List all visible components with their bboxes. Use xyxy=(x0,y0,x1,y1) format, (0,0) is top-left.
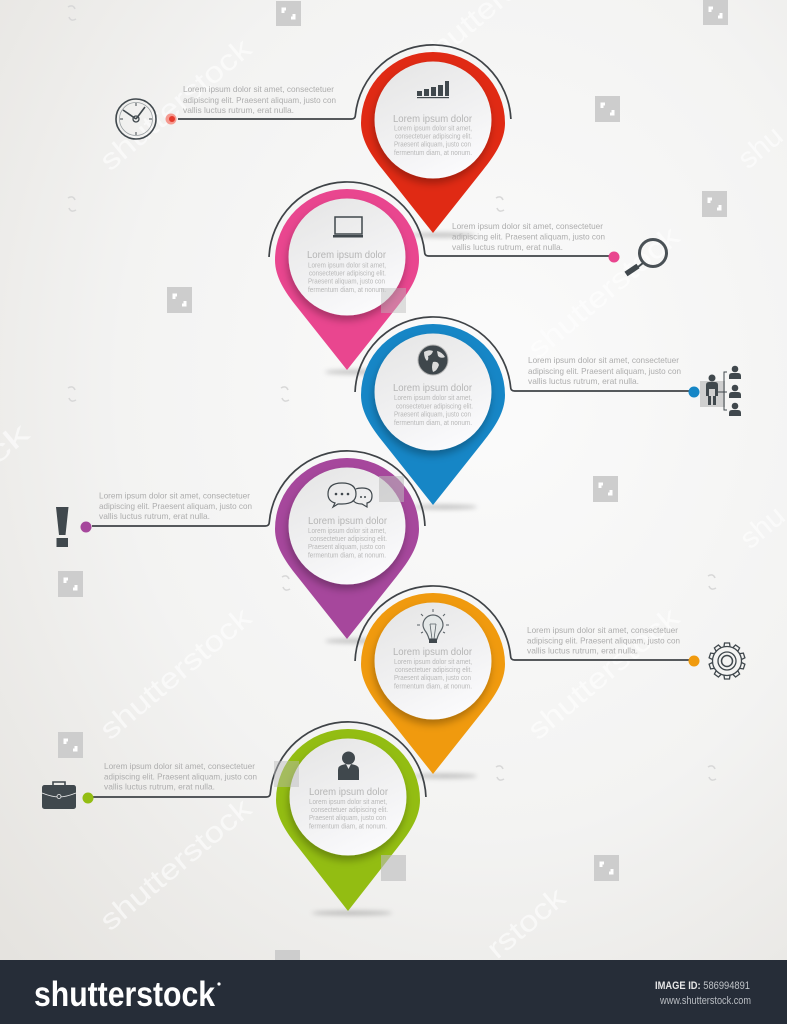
icon: organisation chart xyxy=(700,366,741,416)
node dot 3 xyxy=(688,386,700,398)
inner disc xyxy=(374,602,492,720)
icon: bar chart xyxy=(417,81,449,98)
registered mark xyxy=(217,982,221,986)
icon: gear xyxy=(709,643,745,679)
pin text: Praesent aliquam, justo con xyxy=(394,412,471,418)
icon: laptop xyxy=(333,217,363,238)
side text 5 xyxy=(527,625,680,656)
pin text: Praesent aliquam, justo con xyxy=(308,278,385,286)
pin 4: purple xyxy=(92,451,425,644)
pin text: fermentum diam, at nonum. xyxy=(309,824,387,830)
side text 1 xyxy=(183,84,336,115)
pin text xyxy=(308,515,387,560)
side text 4: Lorem ipsum dolor sit amet, consectetuer xyxy=(99,490,250,500)
icon: person xyxy=(338,752,359,780)
pin text: consectetuer adipiscing elit. xyxy=(310,536,387,543)
pin text: Lorem ipsum dolor sit amet, xyxy=(308,262,386,270)
side text 5: Lorem ipsum dolor sit amet, consectetuer xyxy=(527,625,678,635)
icon: globe xyxy=(418,345,448,375)
connector arc and line xyxy=(269,182,614,257)
watermark layer: shutterstock xyxy=(522,601,686,746)
icon: clock xyxy=(116,99,156,139)
pin text: Lorem ipsum dolor sit amet, xyxy=(309,799,387,806)
node dot 5 xyxy=(688,656,700,666)
pin text: fermentum diam, at nonum. xyxy=(308,287,386,294)
watermark layer: shu xyxy=(732,120,787,175)
pin text: consectetuer adipiscing elit. xyxy=(309,270,386,278)
pin text: fermentum diam, at nonum. xyxy=(394,150,472,157)
side text 4: adipiscing elit. Praesent aliquam, justo con xyxy=(99,501,252,511)
watermark square over pin 2 xyxy=(381,288,406,313)
inner disc xyxy=(288,198,406,316)
pin text xyxy=(393,113,472,157)
pin text: fermentum diam, at nonum. xyxy=(308,552,386,560)
pin text: Lorem ipsum dolor xyxy=(393,113,472,125)
icon: chat bubbles xyxy=(328,483,372,507)
watermark layer: rstock xyxy=(481,881,572,965)
inner disc xyxy=(288,468,406,584)
pin text: Lorem ipsum dolor xyxy=(308,515,387,527)
pin text: Lorem ipsum dolor xyxy=(393,382,472,394)
side text 2: adipiscing elit. Praesent aliquam, justo con xyxy=(452,232,605,242)
side text 3: vallis luctus rutrum, erat nulla. xyxy=(528,376,639,386)
pin text: Lorem ipsum dolor xyxy=(307,249,386,261)
watermark layer: shutterstock xyxy=(94,32,258,177)
side text 5: vallis luctus rutrum, erat nulla. xyxy=(527,646,638,656)
side text 6: Lorem ipsum dolor sit amet, consectetuer xyxy=(104,761,255,771)
node dot 6 xyxy=(82,792,94,804)
image id: IMAGE ID: 586994891 xyxy=(655,980,750,992)
side text 2 xyxy=(452,221,605,252)
side text 3: Lorem ipsum dolor sit amet, consectetuer xyxy=(528,355,679,365)
footer logo: shutterstock xyxy=(34,975,215,1014)
footer bar xyxy=(0,960,787,1024)
side text 3: adipiscing elit. Praesent aliquam, justo con xyxy=(528,366,681,376)
side text 1: Lorem ipsum dolor sit amet, consectetuer xyxy=(183,84,334,94)
pin text: consectetuer adipiscing elit. xyxy=(395,134,472,140)
pin text xyxy=(309,786,388,830)
side text 5: adipiscing elit. Praesent aliquam, justo con xyxy=(527,636,680,646)
pin text: Praesent aliquam, justo con xyxy=(308,544,385,551)
watermark layer: shutterstock xyxy=(94,792,258,937)
pin 6: green xyxy=(93,722,426,916)
connector arc and line xyxy=(92,451,425,526)
pin text: consectetuer adipiscing elit. xyxy=(311,807,388,814)
connector arc and line xyxy=(355,317,693,392)
watermark square over pin 4 xyxy=(379,476,404,502)
node dot 4 xyxy=(80,522,92,532)
pin text: Lorem ipsum dolor sit amet, xyxy=(308,528,386,535)
side text 1: adipiscing elit. Praesent aliquam, justo con xyxy=(183,95,336,105)
pin text xyxy=(393,646,472,690)
connector arc and line xyxy=(93,722,426,797)
pin text: Lorem ipsum dolor sit amet, xyxy=(394,395,472,402)
pin text: fermentum diam, at nonum. xyxy=(394,420,472,427)
inner disc xyxy=(374,62,492,178)
node dot 2 xyxy=(608,252,620,262)
pin text: Lorem ipsum dolor sit amet, xyxy=(394,126,472,132)
inner disc xyxy=(290,738,406,856)
pin 5: orange xyxy=(355,586,694,778)
icon: light bulb xyxy=(417,609,449,643)
side text 1: vallis luctus rutrum, erat nulla. xyxy=(183,105,294,115)
pin text: Lorem ipsum dolor xyxy=(309,786,388,798)
pin text: consectetuer adipiscing elit. xyxy=(396,404,473,410)
icon: magnifier xyxy=(626,240,666,274)
pin text: Praesent aliquam, justo con xyxy=(394,142,471,148)
inner disc xyxy=(374,334,492,450)
side text 4 xyxy=(99,490,252,521)
watermark layer: shutterstock xyxy=(522,220,686,365)
pin text: Praesent aliquam, justo con xyxy=(309,815,386,822)
watermark layer: shutterstock xyxy=(94,601,258,746)
pin text: Praesent aliquam, justo con xyxy=(394,675,471,682)
node dot 1 xyxy=(166,114,176,124)
pin text xyxy=(307,249,386,294)
side text 3 xyxy=(528,355,681,386)
watermark squares over pin 6 xyxy=(274,761,406,881)
side text 6 xyxy=(104,761,257,792)
pin 2: pink xyxy=(269,182,614,374)
side text 4: vallis luctus rutrum, erat nulla. xyxy=(99,511,210,521)
pin text: consectetuer adipiscing elit. xyxy=(395,667,472,674)
pin 3: blue xyxy=(355,317,693,510)
side text 2: Lorem ipsum dolor sit amet, consectetuer xyxy=(452,221,603,231)
footer url: www.shutterstock.com xyxy=(659,995,751,1007)
icon: exclamation mark xyxy=(56,507,68,547)
pin text: Lorem ipsum dolor sit amet, xyxy=(394,659,472,666)
side text 6: vallis luctus rutrum, erat nulla. xyxy=(104,782,215,792)
pin text xyxy=(393,382,473,427)
connector arc and line xyxy=(178,45,511,119)
pin 1: red xyxy=(178,45,511,238)
connector arc and line xyxy=(355,586,694,661)
pin text: fermentum diam, at nonum. xyxy=(394,684,472,690)
pin text: Lorem ipsum dolor xyxy=(393,646,472,658)
icon: briefcase xyxy=(42,782,76,809)
side text 2: vallis luctus rutrum, erat nulla. xyxy=(452,242,563,252)
side text 6: adipiscing elit. Praesent aliquam, justo con xyxy=(104,772,257,782)
